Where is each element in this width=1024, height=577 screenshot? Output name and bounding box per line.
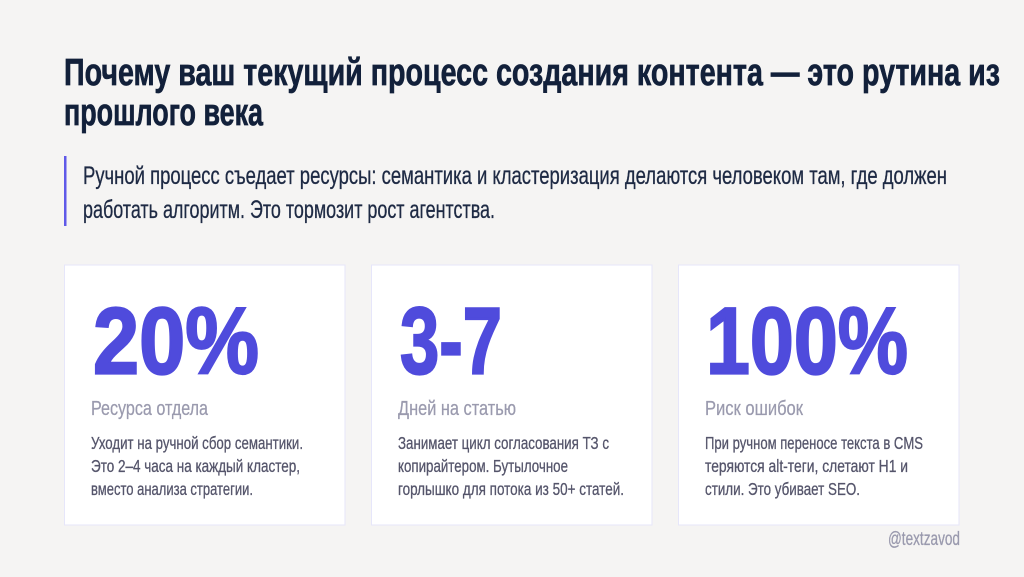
- description: days per article: горлышко для потока из 50+ статей.: [398, 479, 624, 499]
- label: days per article: Дней на статью: [398, 397, 516, 420]
- description: error risk: стили. Это убивает SEO.: [705, 479, 860, 499]
- stat: 20%: 20%: [93, 288, 259, 394]
- description: days per article: Занимает цикл согласования ТЗ с: [398, 433, 609, 453]
- card background: [64, 265, 345, 525]
- panel: days per article: [372, 265, 652, 525]
- description: days per article: [398, 433, 624, 499]
- description: department resource: Это 2–4 часа на каждый кластер,: [91, 456, 300, 476]
- description: error risk: При ручном переносе текста в CMS: [705, 433, 923, 453]
- accent bar: [64, 156, 66, 226]
- title: прошлого века: [64, 92, 264, 134]
- description: days per article: копирайтером. Бутылочное: [398, 456, 568, 476]
- label: error risk: Риск ошибок: [705, 397, 804, 420]
- stat: 3-7: 3-7: [400, 288, 502, 394]
- subtitle text: [83, 162, 947, 224]
- label: department resource: Ресурса отдела: [91, 397, 208, 420]
- watermark: @textzavod: [888, 529, 960, 550]
- card background: [372, 265, 652, 525]
- description: error risk: [705, 433, 923, 499]
- subtitle text: работать алгоритм. Это тормозит рост агентства.: [83, 196, 495, 224]
- description: department resource: [91, 433, 303, 499]
- description: department resource: Уходит на ручной сбор семантики.: [91, 433, 303, 453]
- card background: [678, 265, 959, 525]
- description: department resource: вместо анализа стратегии.: [91, 479, 253, 499]
- panel: department resource: [64, 265, 345, 525]
- title: [64, 52, 1000, 134]
- panel: error risk: [678, 265, 959, 525]
- callout: subtitle with accent bar: [64, 156, 947, 226]
- stat: 100%: 100%: [706, 288, 908, 394]
- description: error risk: теряются alt-теги, слетают H1 и: [705, 456, 908, 476]
